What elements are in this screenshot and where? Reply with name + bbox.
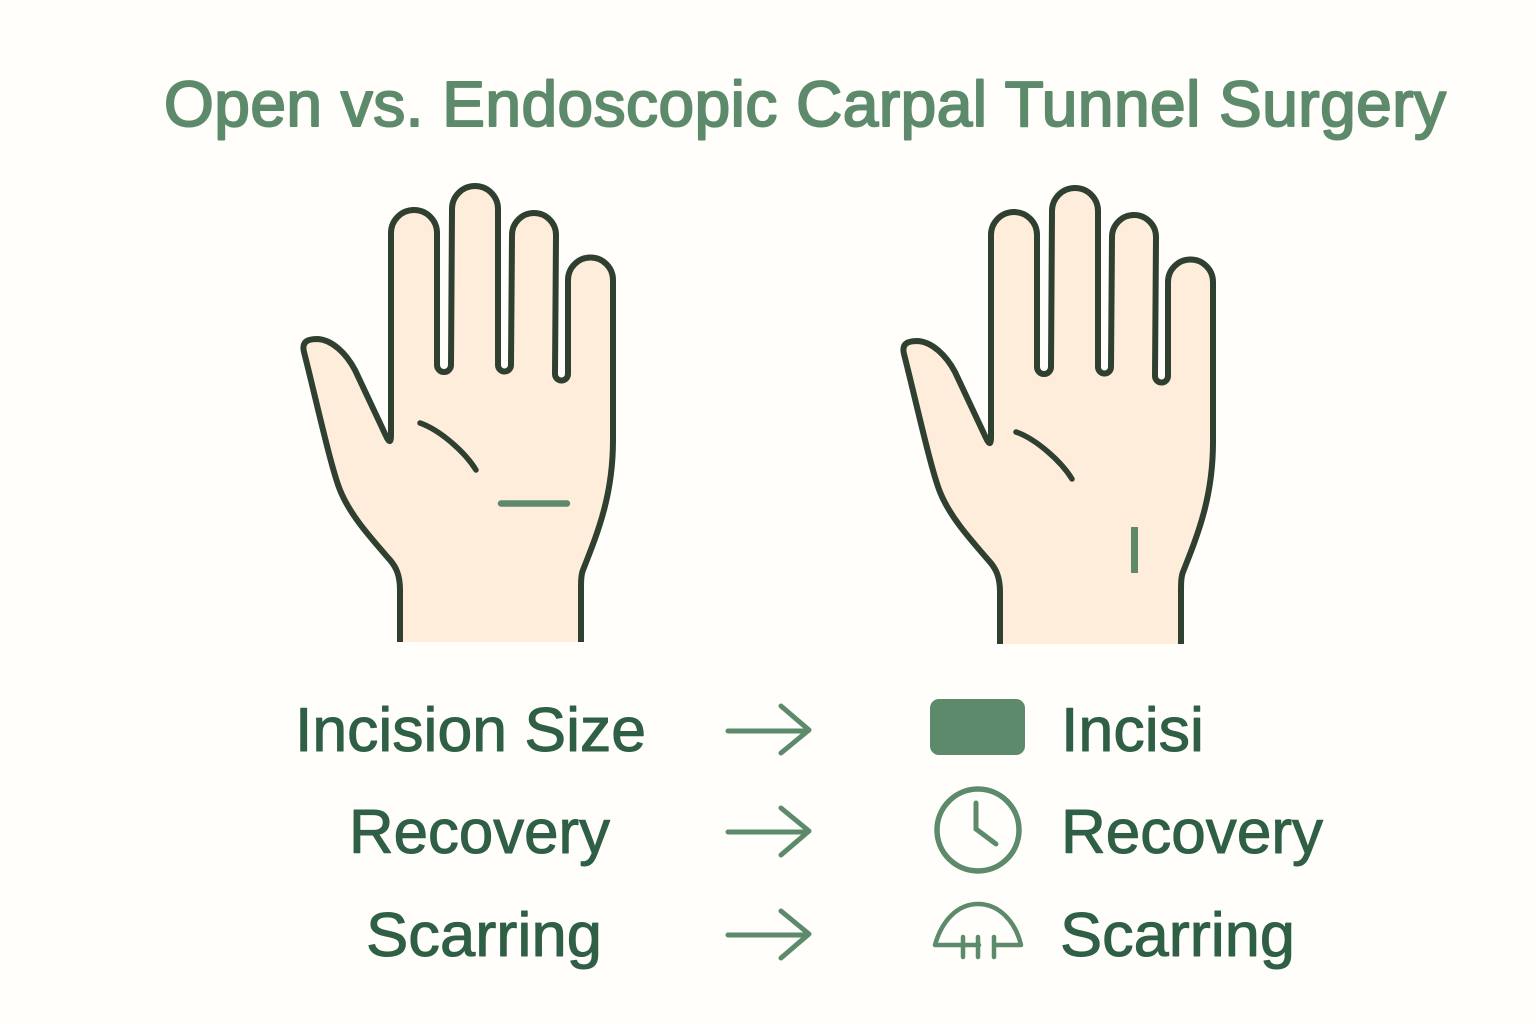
label: Scarring right: Scarring <box>1060 901 1295 970</box>
illustration: open surgery hand <box>303 186 613 642</box>
label: Incision Size: Incision Size <box>295 696 646 765</box>
icon: clock <box>937 789 1019 871</box>
icon: scar dome <box>935 904 1021 957</box>
arrow: scarring <box>728 911 809 958</box>
label: Recovery right: Recovery <box>1061 798 1323 867</box>
incision: horizontal <box>501 500 567 507</box>
illustration: endoscopic surgery hand <box>903 188 1213 644</box>
label: Recovery: Recovery <box>349 798 610 867</box>
palm crease <box>1016 432 1072 479</box>
incision: vertical <box>1131 527 1138 573</box>
arrow: recovery <box>728 808 809 855</box>
palm crease <box>420 423 476 470</box>
title: Open vs. Endoscopic Carpal Tunnel Surgery <box>164 68 1446 140</box>
label: Scarring: Scarring <box>366 901 602 970</box>
icon: incision rectangle <box>930 699 1025 755</box>
arrow: incision size <box>728 706 809 753</box>
label: Incisi: Incisi <box>1061 696 1204 765</box>
